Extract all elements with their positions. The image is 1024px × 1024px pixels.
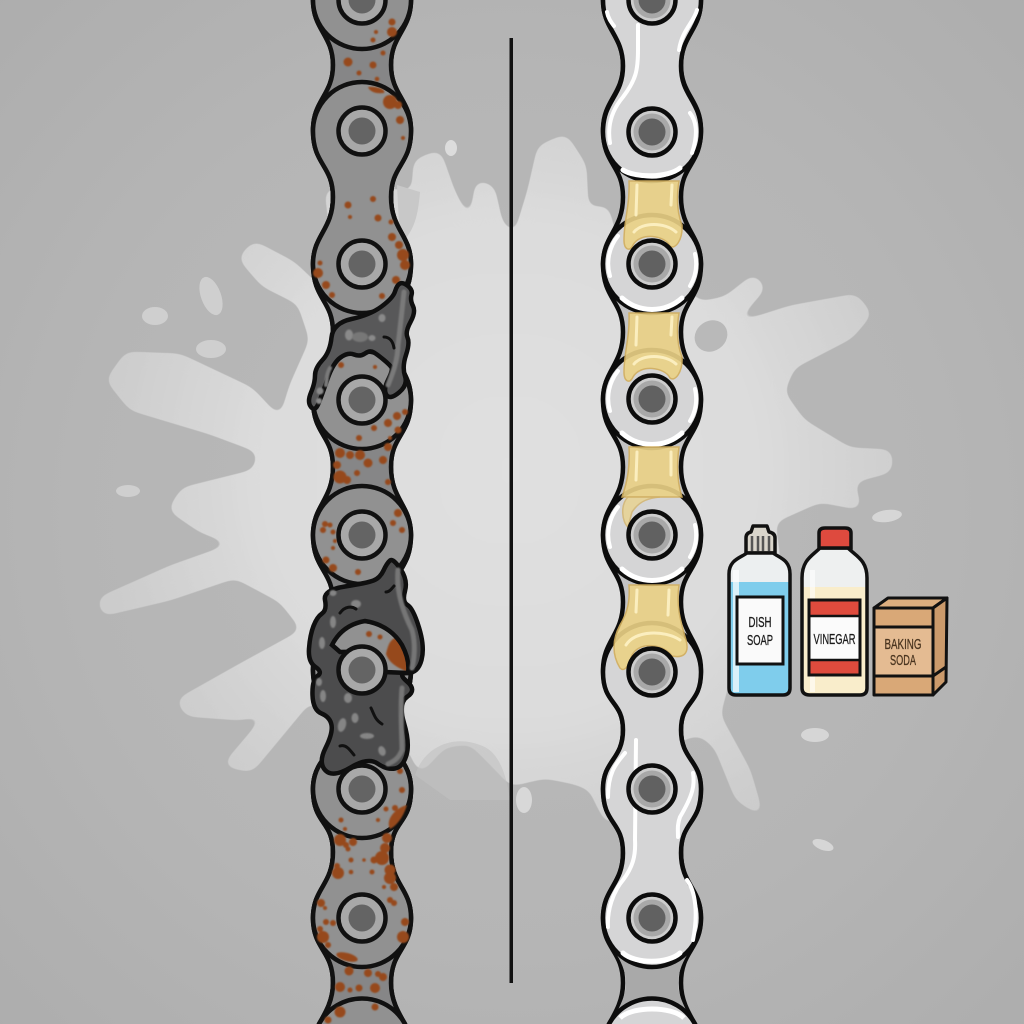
right plates [603, 0, 701, 1024]
left pins [338, 0, 386, 24]
right chain: clean and oiled [603, 0, 701, 1024]
center divider line [510, 38, 513, 983]
vinegar label [809, 600, 860, 675]
paint splatter backdrop [98, 134, 903, 853]
dish soap bottle: SOAP [747, 632, 773, 649]
droplets [116, 140, 903, 853]
left chain: dirty, rusty [309, 0, 423, 1024]
dish soap bottle [729, 526, 790, 695]
left plates [313, 0, 411, 1024]
right pins [628, 0, 676, 24]
right chain silhouette [603, 0, 701, 1024]
grease clump lower [309, 560, 423, 774]
soap cap [746, 526, 775, 553]
splat shadow blotches [688, 314, 734, 358]
left chain silhouette [313, 0, 411, 1024]
baking soda box: SODA [890, 652, 916, 669]
oil shine [626, 185, 680, 645]
bottom inner link grey [617, 955, 687, 1012]
left pins over grease [338, 646, 386, 694]
dish soap bottle: DISH [748, 614, 772, 631]
plate highlights [607, 10, 697, 1018]
left pin under upper grease [338, 376, 386, 424]
vinegar bottle: VINEGAR [814, 631, 856, 648]
baking soda box [874, 598, 947, 695]
grease clump upper [309, 283, 414, 409]
rust spots [313, 18, 410, 1024]
soap label [737, 597, 783, 664]
baking soda box: BAKING [884, 636, 922, 653]
left waist fill [313, 0, 411, 1024]
vinegar bottle [802, 528, 867, 695]
vinegar cap [819, 528, 851, 548]
oil coating [614, 181, 687, 669]
